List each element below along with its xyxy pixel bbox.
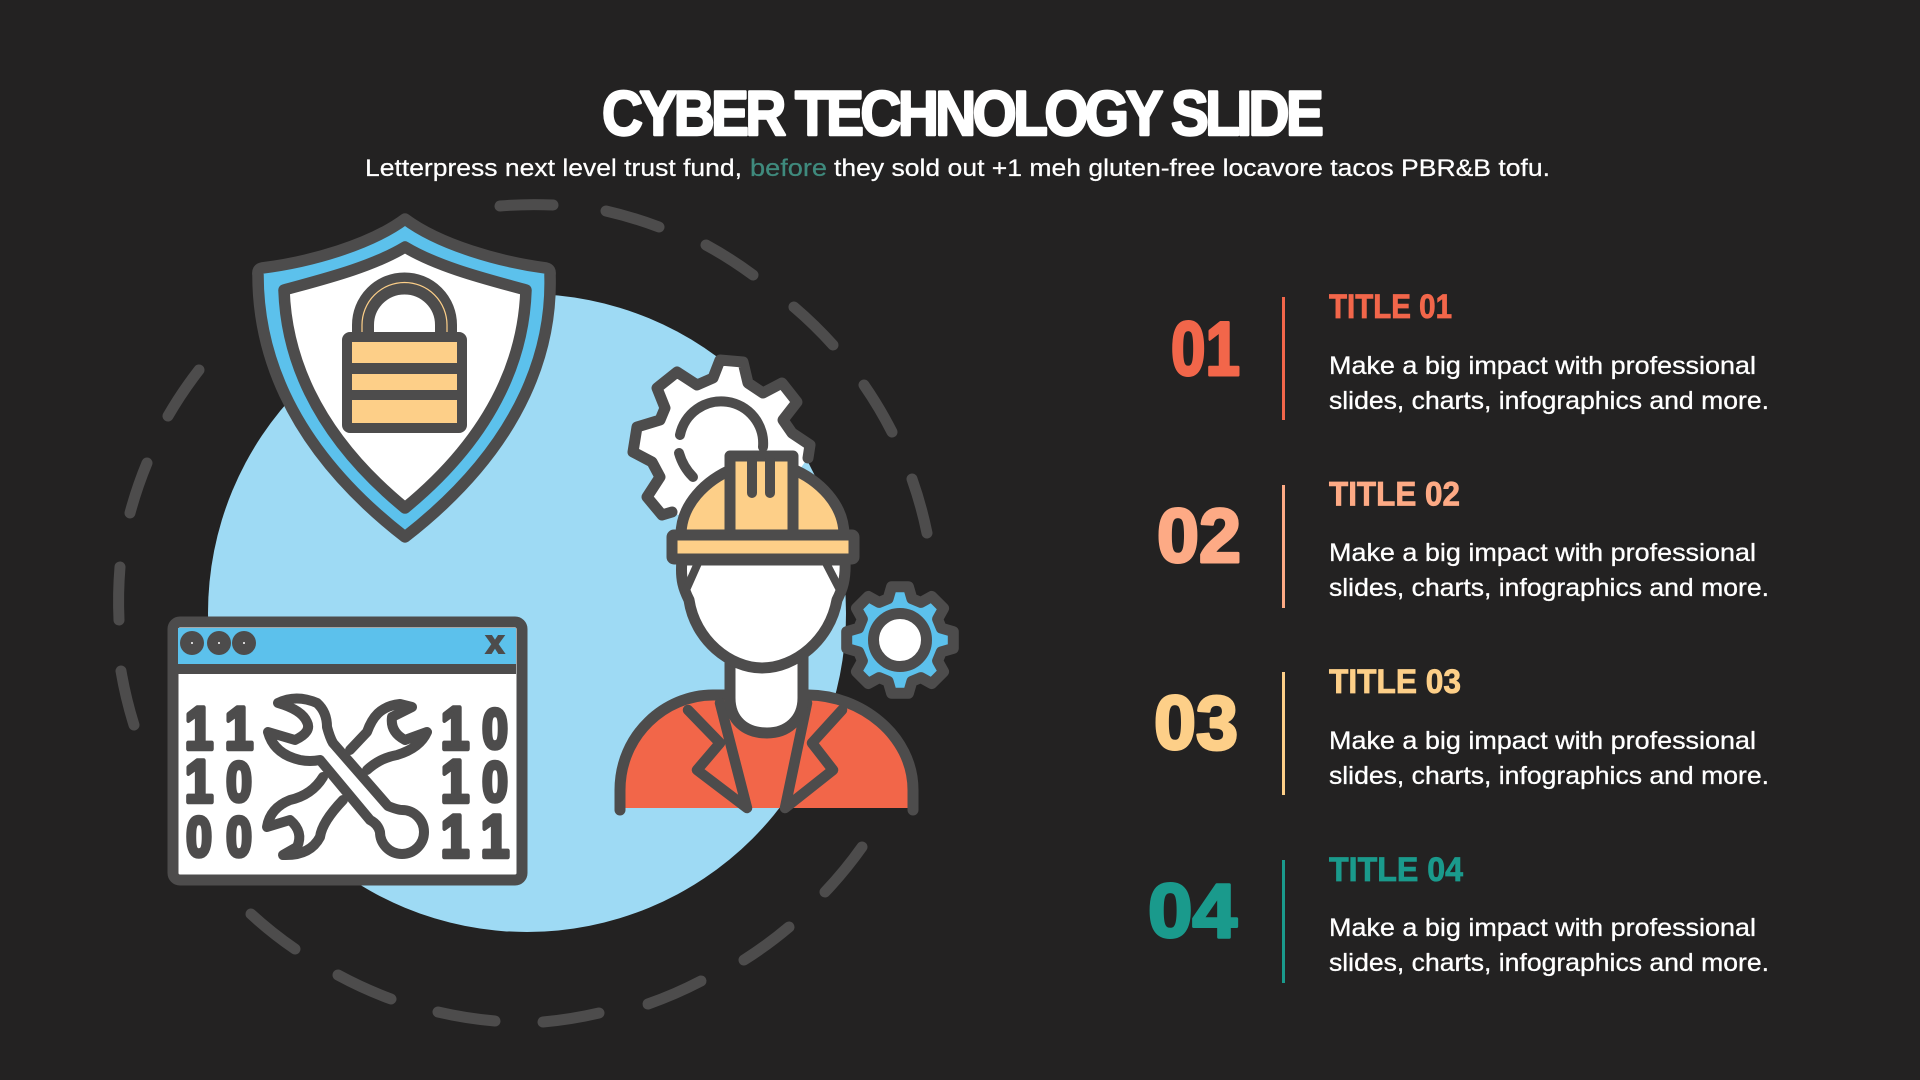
number 02: 02 <box>1157 494 1241 579</box>
text 04: slides, charts, infographics and more. <box>1329 949 1769 977</box>
text 01 <box>1329 352 1769 415</box>
binary digits: 0 <box>226 751 252 813</box>
binary digits: 1 <box>441 695 469 762</box>
subtitle: before <box>750 155 827 182</box>
item 03 <box>1154 663 1769 795</box>
title 04: TITLE 04 <box>1329 851 1463 889</box>
icon: browser window with tools and binary <box>173 622 522 880</box>
number 03: 03 <box>1154 681 1238 766</box>
icon: large white gear <box>633 360 810 520</box>
subtitle: Letterpress next level trust fund, <box>365 155 742 182</box>
text 01: slides, charts, infographics and more. <box>1329 387 1769 415</box>
icon: small blue gear <box>847 587 953 693</box>
item 04 <box>1148 851 1769 983</box>
subtitle: they sold out +1 meh gluten-free locavore tacos PBR&B tofu. <box>834 155 1550 182</box>
hard hat <box>672 456 854 559</box>
engineer head <box>681 560 845 668</box>
subtitle <box>365 155 1550 182</box>
title: CYBER TECHNOLOGY SLIDE <box>602 78 1324 149</box>
divider 02 <box>1282 485 1285 608</box>
item 01 <box>1171 288 1769 420</box>
divider 04 <box>1282 860 1285 983</box>
number 01: 01 <box>1171 307 1240 392</box>
binary digits: 0 <box>186 806 212 868</box>
text 04 <box>1329 914 1769 977</box>
icon: engineer with hard hat <box>620 456 913 810</box>
icon: shield with padlock <box>258 219 550 537</box>
binary digits: 1 <box>481 803 509 870</box>
window title bar <box>178 624 516 674</box>
binary digits: 0 <box>226 806 252 868</box>
binary digits: 1 <box>185 748 213 815</box>
icon: crossed wrenches <box>267 698 427 855</box>
title 02: TITLE 02 <box>1329 476 1460 514</box>
text 04: Make a big impact with professional <box>1329 914 1756 942</box>
binary digits: 1 <box>225 695 253 762</box>
binary digits: 1 <box>441 803 469 870</box>
text 02: Make a big impact with professional <box>1329 539 1756 567</box>
padlock shackle <box>362 282 447 336</box>
title 01: TITLE 01 <box>1329 288 1452 326</box>
binary digits: 0 <box>482 751 508 813</box>
text 02: slides, charts, infographics and more. <box>1329 574 1769 602</box>
binary digits: 1 <box>441 748 469 815</box>
text 02 <box>1329 539 1769 602</box>
number 04: 04 <box>1148 869 1237 954</box>
title 03: TITLE 03 <box>1329 663 1461 701</box>
text 03: slides, charts, infographics and more. <box>1329 762 1769 790</box>
binary digits <box>185 695 509 870</box>
padlock body <box>347 337 462 428</box>
binary digits: 0 <box>482 698 508 760</box>
text 03: Make a big impact with professional <box>1329 727 1756 755</box>
window title bar: x <box>486 624 504 660</box>
light blue background circle <box>208 294 846 932</box>
binary digits: 1 <box>185 695 213 762</box>
text 03 <box>1329 727 1769 790</box>
engineer body <box>620 695 913 810</box>
engineer neck <box>730 655 803 733</box>
divider 01 <box>1282 297 1285 420</box>
item 02 <box>1157 476 1769 608</box>
dashed ring <box>119 205 927 1022</box>
divider 03 <box>1282 672 1285 795</box>
text 01: Make a big impact with professional <box>1329 352 1756 380</box>
